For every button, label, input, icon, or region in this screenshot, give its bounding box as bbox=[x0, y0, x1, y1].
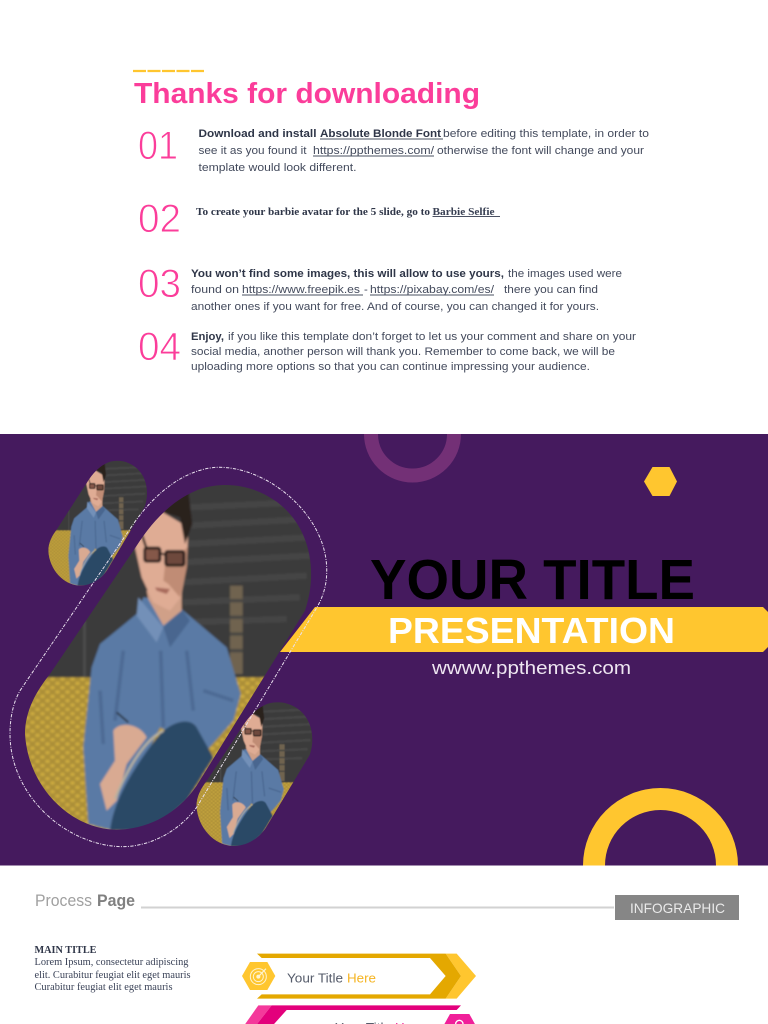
section heading bbox=[36, 894, 134, 910]
icon: target hexagon bbox=[242, 962, 275, 990]
arrow 1 label: Here bbox=[347, 970, 376, 986]
main title text block: elit. Curabitur feugiat elit eget mauris bbox=[34, 970, 190, 981]
arrow light chevron bbox=[243, 1005, 272, 1024]
website: wwww.ppthemes.com bbox=[431, 657, 631, 678]
heading: Thanks for downloading bbox=[134, 78, 480, 110]
text block 01: before editing this template, in order to bbox=[443, 128, 649, 140]
text block 03: https://www.freepik.es bbox=[242, 284, 360, 296]
purple background bbox=[0, 434, 768, 866]
arrow dark outline bbox=[257, 954, 461, 999]
section heading: Process bbox=[35, 892, 92, 910]
large photo bbox=[0, 467, 333, 841]
text block 02: Barbie Selfie bbox=[432, 207, 495, 218]
yellow hexagon bbox=[644, 467, 677, 496]
text block 03 bbox=[191, 268, 622, 313]
main title text block bbox=[34, 945, 190, 993]
number 04: 04 bbox=[138, 325, 181, 369]
infographic tag: INFOGRAPHIC bbox=[630, 900, 725, 916]
yellow banner bbox=[280, 607, 768, 652]
text block 04: uploading more options so that you can continue impressing your audience. bbox=[191, 361, 590, 373]
arrow 1 label: Your Title bbox=[287, 970, 343, 986]
panel: purple title slide bbox=[0, 392, 768, 866]
text block 03: found on bbox=[191, 284, 239, 296]
dashed outline bbox=[10, 467, 327, 847]
number 01: 01 bbox=[138, 124, 178, 168]
text block 01: https://ppthemes.com/ bbox=[313, 145, 435, 157]
text block 03: there you can find bbox=[504, 284, 598, 296]
text block 01: otherwise the font will change and your bbox=[437, 145, 644, 157]
text block 01: Absolute Blonde Font bbox=[320, 128, 441, 140]
small photo top bbox=[40, 454, 155, 590]
text block 03: https://pixabay.com/es/ bbox=[370, 284, 495, 296]
text block 03: the images used were bbox=[508, 268, 622, 280]
photo cluster bbox=[0, 454, 333, 851]
text block 04: social media, another person will thank you. Remember to come back, we will be bbox=[191, 346, 615, 358]
arrow dark outline bbox=[255, 1005, 461, 1024]
text block 01: Download and install bbox=[198, 128, 316, 140]
process arrow 1 bbox=[242, 954, 476, 999]
decorative ring bbox=[364, 434, 461, 482]
subtitle: PRESENTATION bbox=[388, 610, 675, 651]
text block 01: see it as you found it bbox=[198, 145, 307, 157]
number 02: 02 bbox=[138, 197, 181, 241]
text block 04: if you like this template don’t forget to let us your comment and share on your bbox=[228, 331, 636, 343]
small photo bottom bbox=[186, 695, 321, 851]
arrow 1 label bbox=[287, 973, 376, 982]
main title: YOUR TITLE bbox=[370, 548, 695, 612]
text block 04 bbox=[191, 331, 636, 373]
text block 03: - bbox=[364, 284, 368, 296]
number 03: 03 bbox=[138, 262, 181, 306]
main title text block: Lorem Ipsum, consectetur adipiscing bbox=[34, 957, 188, 968]
section heading: Page bbox=[97, 892, 135, 910]
accent dashes bbox=[133, 70, 205, 72]
panel: process page bbox=[34, 892, 739, 1024]
main title text block: Curabitur feugiat elit eget mauris bbox=[34, 982, 172, 993]
text block 01 bbox=[198, 128, 649, 174]
process arrow 2 bbox=[243, 1005, 477, 1024]
text block 02: To create your barbie avatar for the 5 slide, go to bbox=[196, 207, 430, 218]
panel: thanks for downloading bbox=[133, 71, 649, 373]
text block 01: template would look different. bbox=[198, 162, 356, 174]
infographic tag bbox=[615, 895, 739, 920]
text block 04: Enjoy, bbox=[191, 331, 224, 343]
icon: pink hexagon bbox=[444, 1014, 475, 1024]
arrow light chevron bbox=[446, 954, 476, 999]
text block 03: another ones if you want for free. And of course, you can changed it for yours. bbox=[191, 301, 599, 313]
yellow arch bbox=[583, 788, 738, 866]
main title text block: MAIN TITLE bbox=[34, 945, 97, 956]
text block 03: You won’t find some images, this will allow to use yours, bbox=[191, 268, 504, 280]
arrow 2 label bbox=[335, 1022, 404, 1024]
